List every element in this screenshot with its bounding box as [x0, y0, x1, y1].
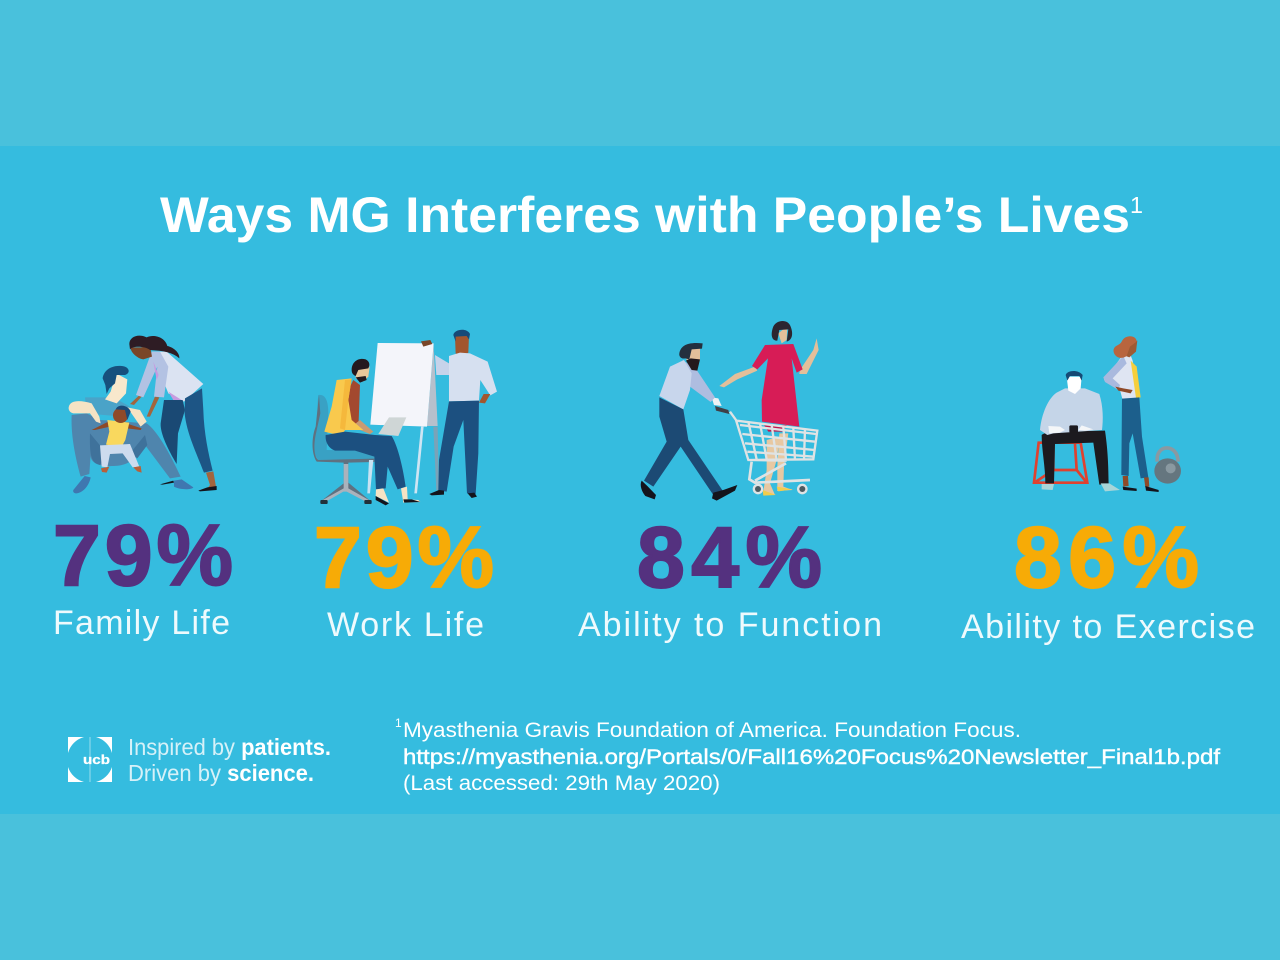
- percentage: 79%: 79%: [53, 508, 233, 604]
- panel: ability to function: [578, 321, 882, 644]
- ucb logo: [68, 734, 331, 786]
- panel: family life: [53, 336, 233, 642]
- percentage: 84%: 84%: [637, 510, 822, 606]
- percentage: 79%: 79%: [314, 510, 494, 606]
- footnote reference: Myasthenia Gravis Foundation of America. Foundation Focus.: [403, 719, 1021, 742]
- label: work life: Work Life: [327, 606, 484, 644]
- tagline: Driven by science.: [128, 760, 314, 786]
- tagline: [128, 734, 331, 786]
- icon: shopping couple: [641, 321, 819, 501]
- main panel: [0, 146, 1280, 814]
- icon: exercise: [1034, 336, 1181, 492]
- footnote reference: [395, 716, 1220, 795]
- icon: office: [313, 330, 497, 505]
- title: 1: [1130, 192, 1143, 218]
- label: family life: Family Life: [53, 604, 230, 642]
- percentage: 86%: 86%: [1014, 510, 1199, 606]
- footnote reference: 1: [395, 716, 402, 730]
- label: ability to exercise: Ability to Exercise: [961, 608, 1255, 646]
- icon: family: [69, 336, 217, 493]
- tagline: Inspired by patients.: [128, 734, 331, 760]
- icon: ucb mark: ucb: [83, 752, 110, 767]
- panel: work life: [313, 330, 497, 644]
- footnote reference: https://myasthenia.org/Portals/0/Fall16%20Focus%20Newsletter_Final1b.pdf: [403, 746, 1220, 769]
- title: Ways MG Interferes with People’s Lives: [160, 187, 1130, 243]
- icon: ucb mark: [68, 737, 112, 782]
- label: ability to function: Ability to Function: [578, 606, 882, 644]
- footnote reference: (Last accessed: 29th May 2020): [403, 772, 720, 795]
- panel: ability to exercise: [961, 336, 1255, 646]
